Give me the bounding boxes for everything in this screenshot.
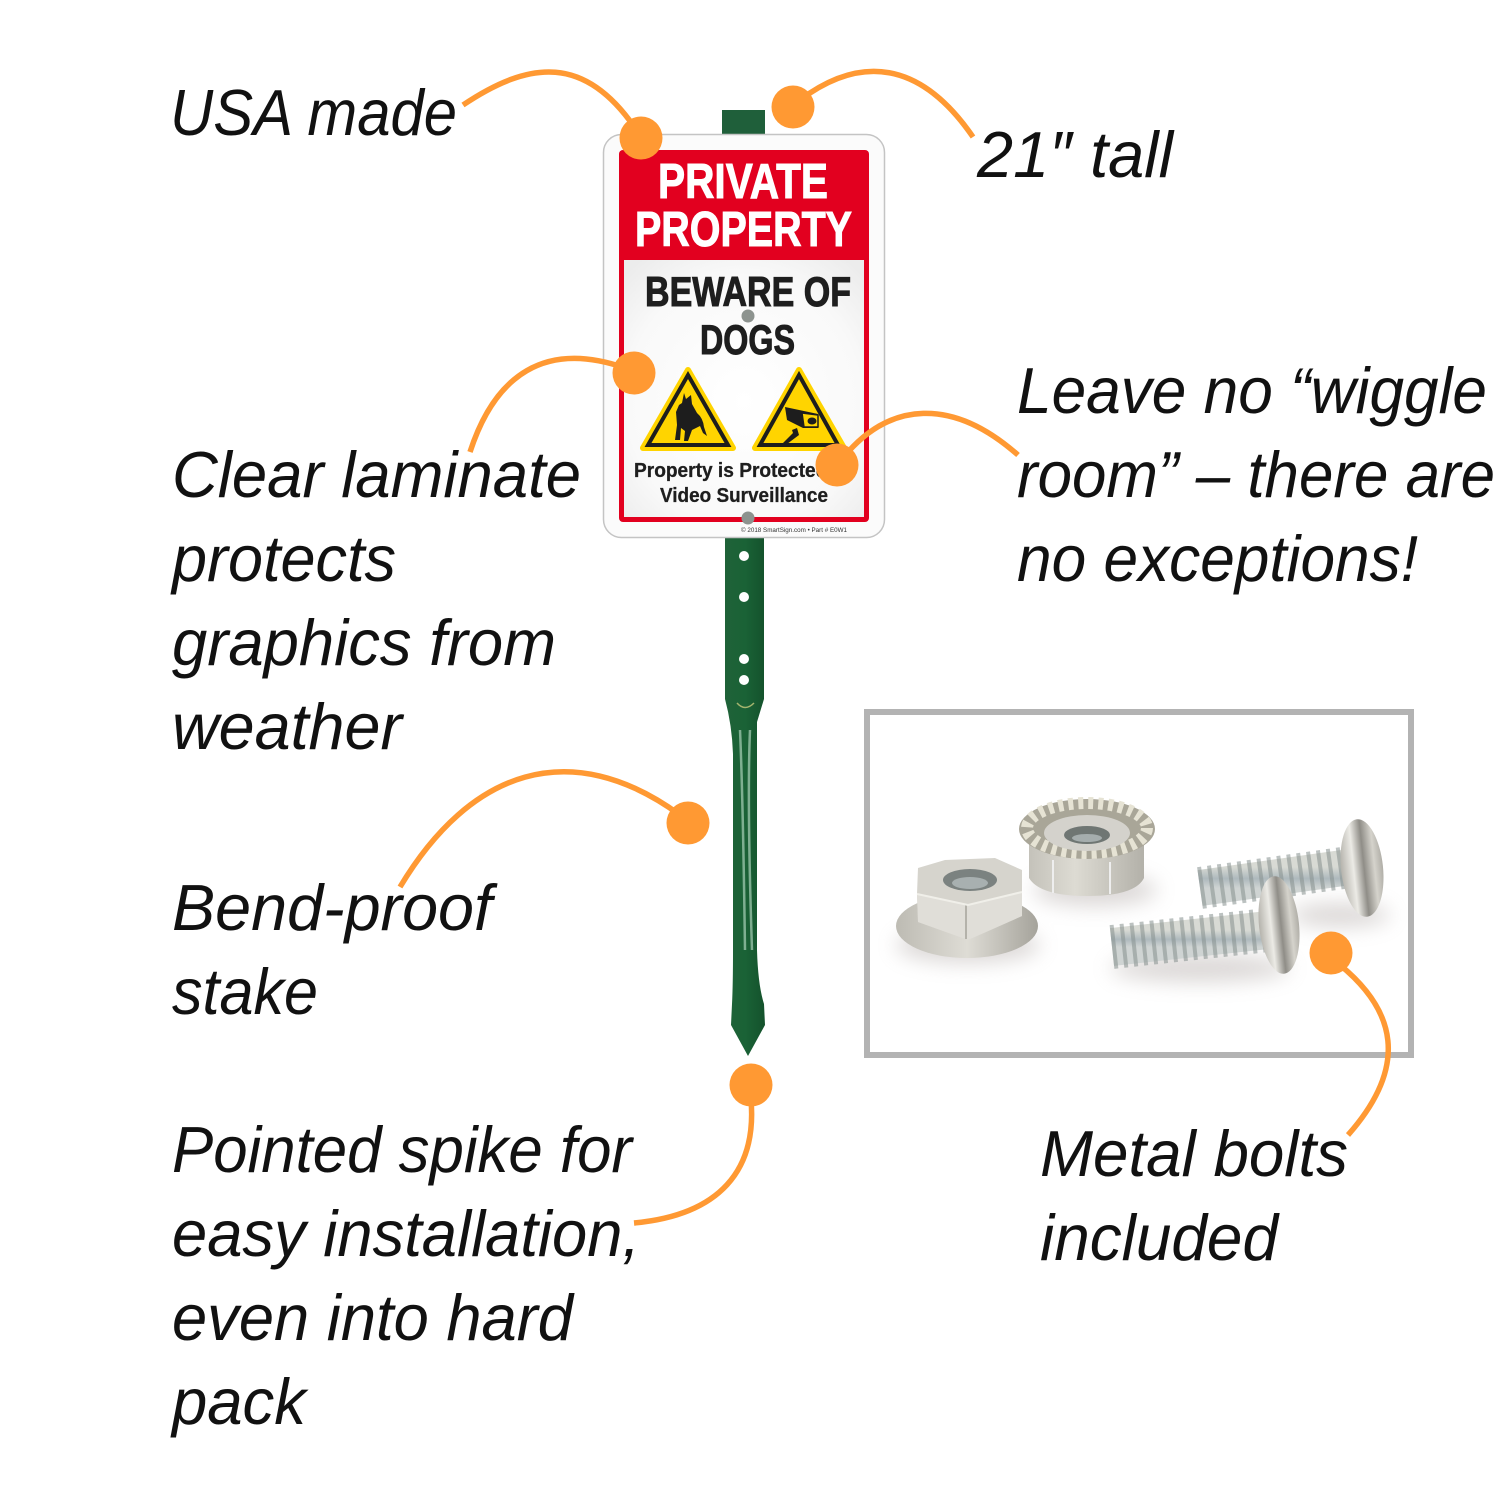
callout: clear laminate: Clear laminate <box>172 438 581 511</box>
sign white panel <box>624 260 864 517</box>
callout: pointed spike: Pointed spike for <box>172 1113 634 1186</box>
sign heading: private property: PROPERTY <box>635 203 852 257</box>
callout: USA made: USA made <box>170 76 457 149</box>
callout: pointed spike: easy installation, <box>172 1197 640 1270</box>
shadows <box>896 874 1390 982</box>
sign text: surveillance notice <box>634 460 856 507</box>
callout: metal bolts: Metal bolts <box>1040 1117 1348 1190</box>
callout: no wiggle room: Leave no “wiggle <box>1017 354 1487 427</box>
sign text: surveillance notice: Video Surveillance <box>660 485 828 507</box>
callout: pointed spike <box>170 1064 773 1438</box>
sign heading: beware of dogs <box>645 268 851 363</box>
stake <box>722 110 765 1056</box>
icon: back bolt <box>1200 817 1388 919</box>
callout: bend-proof stake: Bend-proof <box>172 871 498 944</box>
callout: USA made <box>170 72 662 160</box>
panel: hardware photo <box>867 712 1411 1055</box>
callout: metal bolts <box>1040 932 1388 1274</box>
callout: no wiggle room: no exceptions! <box>1017 522 1418 595</box>
icon: front bolt <box>1112 874 1304 976</box>
icon: screw bottom <box>742 512 754 524</box>
callout: clear laminate <box>170 352 656 763</box>
callout: pointed spike: even into hard <box>172 1281 575 1354</box>
sign <box>604 134 884 538</box>
sign text: surveillance notice: Property is Protected by <box>634 460 856 482</box>
callout: no wiggle room <box>816 354 1495 595</box>
icon: flange nut <box>896 858 1038 958</box>
sign heading: private property <box>635 155 852 257</box>
sign heading: beware of dogs: BEWARE OF <box>645 268 851 315</box>
callout: metal bolts: included <box>1040 1201 1280 1274</box>
sign heading: private property: PRIVATE <box>658 155 828 209</box>
sign heading: beware of dogs: DOGS <box>700 316 795 363</box>
icon: dog warning triangle <box>643 370 733 448</box>
callout: clear laminate: weather <box>172 690 404 763</box>
callout: clear laminate: graphics from <box>172 606 556 679</box>
icon: screw top <box>742 310 754 322</box>
callout: bend-proof stake <box>172 772 710 1028</box>
sign red border <box>619 150 869 522</box>
sign fine print: © 2018 SmartSign.com • Part # E0W1 <box>741 526 847 534</box>
callout: bend-proof stake: stake <box>172 955 318 1028</box>
callout: 21 inch tall <box>772 71 1175 191</box>
callout: pointed spike: pack <box>170 1365 309 1438</box>
icon: camera warning triangle <box>755 370 844 448</box>
callout: 21 inch tall: 21″ tall <box>976 118 1175 191</box>
icon: serrated flange nut <box>1019 799 1155 896</box>
callout: clear laminate: protects <box>170 522 396 595</box>
